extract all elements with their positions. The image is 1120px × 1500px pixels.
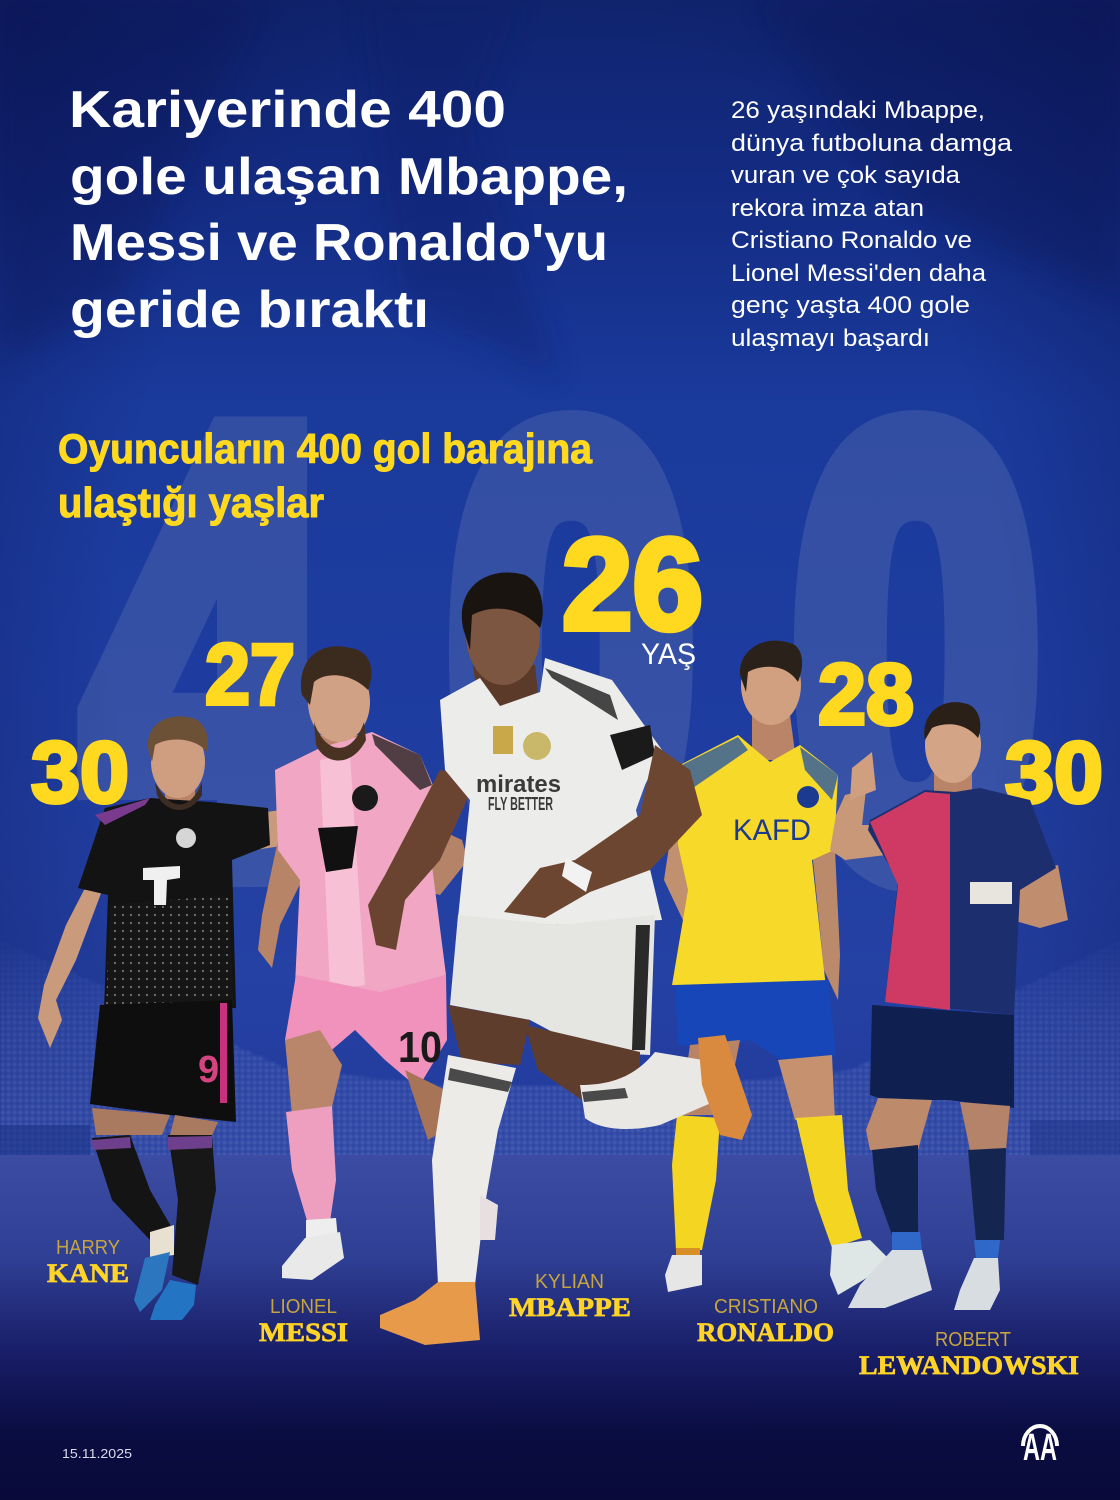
- age 26 Mbappe: YAŞ: [641, 638, 696, 671]
- yellow subheading: ulaştığı yaşlar: [58, 479, 324, 526]
- age 26 Mbappe: 26: [562, 511, 703, 657]
- player name: Harry Kane: [47, 1237, 129, 1288]
- pitch ground: [0, 1155, 1120, 1500]
- player: Robert Lewandowski: [830, 702, 1068, 1310]
- intro text block: Cristiano Ronaldo ve: [731, 227, 972, 254]
- intro text block: vuran ve çok sayıda: [731, 162, 961, 189]
- intro text block: dünya futboluna damga: [731, 130, 1013, 157]
- stadium stands: [0, 962, 1120, 1155]
- big background number 400: 400: [86, 305, 1040, 997]
- logo: AA: [1023, 1426, 1057, 1469]
- intro text block: rekora imza atan: [731, 195, 924, 222]
- player name: Cristiano Ronaldo: CRISTIANO: [714, 1296, 818, 1318]
- yellow subheading: [58, 425, 593, 526]
- player name: Lionel Messi: [259, 1296, 348, 1347]
- player: Kylian Mbappe: FLY BETTER: [488, 794, 553, 814]
- player: Cristiano Ronaldo: KAFD: [733, 814, 811, 847]
- player name: Robert Lewandowski: LEWANDOWSKI: [859, 1351, 1079, 1380]
- age 30 Kane: 30: [31, 725, 129, 821]
- player: Lionel Messi: [258, 646, 468, 1280]
- age 30 Lewandowski: 30: [1005, 725, 1103, 821]
- player: Kylian Mbappe: mirates: [476, 771, 561, 798]
- player name: Lionel Messi: LIONEL: [270, 1296, 337, 1318]
- player name: Kylian Mbappe: KYLIAN: [535, 1271, 604, 1293]
- player name: Kylian Mbappe: MBAPPE: [509, 1293, 631, 1322]
- player: Harry Kane: 9: [198, 1049, 219, 1091]
- player: Harry Kane: [38, 716, 282, 1320]
- intro text block: 26 yaşındaki Mbappe,: [731, 97, 985, 124]
- logo: AA: AA: [1023, 1427, 1057, 1469]
- player name: Lionel Messi: MESSI: [259, 1318, 348, 1347]
- player name: Robert Lewandowski: ROBERT: [935, 1329, 1011, 1351]
- yellow subheading: Oyuncuların 400 gol barajına: [58, 425, 593, 472]
- date: 15.11.2025: [62, 1446, 132, 1461]
- age 27 Messi: 27: [205, 627, 295, 723]
- player name: Harry Kane: HARRY: [56, 1237, 120, 1259]
- player: Kylian Mbappe: [368, 572, 752, 1345]
- title: [69, 81, 628, 339]
- intro text block: [731, 97, 1013, 352]
- player name: Cristiano Ronaldo: RONALDO: [697, 1318, 834, 1347]
- intro text block: ulaşmayı başardı: [731, 325, 930, 352]
- intro text block: genç yaşta 400 gole: [731, 292, 970, 319]
- intro text block: Lionel Messi'den daha: [731, 260, 987, 287]
- player name: Harry Kane: KANE: [47, 1259, 129, 1288]
- player name: Kylian Mbappe: [509, 1271, 631, 1322]
- player name: Robert Lewandowski: [859, 1329, 1079, 1380]
- title: geride bıraktı: [70, 281, 429, 339]
- player name: Cristiano Ronaldo: [697, 1296, 834, 1347]
- age 28 Ronaldo: 28: [818, 647, 914, 743]
- title: Messi ve Ronaldo'yu: [70, 214, 608, 272]
- title: gole ulaşan Mbappe,: [70, 148, 628, 206]
- title: Kariyerinde 400: [69, 81, 506, 139]
- player: Lionel Messi: 10: [398, 1023, 442, 1072]
- player: Cristiano Ronaldo: [664, 641, 892, 1295]
